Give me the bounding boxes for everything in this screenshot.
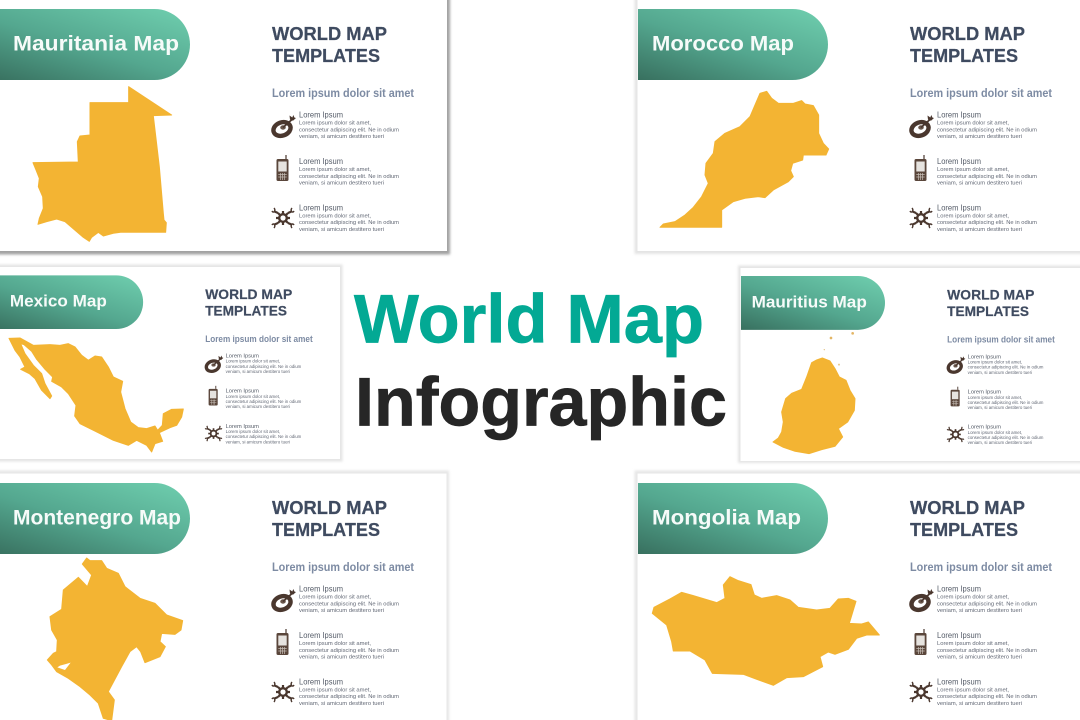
heading and text block: veniam, si amicum destitero tueri [226, 404, 290, 409]
heading and text block: consectetur adipiscing elit. Ne in odium [299, 174, 400, 180]
banner: Mauritania Map [0, 9, 190, 80]
heading and text block: consectetur adipiscing elit. Ne in odium [968, 400, 1044, 405]
heading and text block: Lorem Ipsum [968, 425, 1001, 431]
heading and text block: veniam, si amicum destitero tueri [968, 370, 1032, 375]
heading and text block: Lorem Ipsum [299, 584, 343, 594]
heading and text block: TEMPLATES [947, 303, 1029, 319]
heading and text block: Lorem Ipsum [299, 203, 343, 212]
heading and text block: veniam, si amicum destitero tueri [937, 608, 1022, 614]
heading and text block: Lorem Ipsum [968, 390, 1001, 396]
banner: Montenegro Map [0, 483, 190, 554]
heading and text block: Lorem ipsum dolor sit amet [910, 86, 1052, 100]
heading and text block: veniam, si amicum destitero tueri [299, 180, 384, 186]
banner: Mongolia Map: Mongolia Map [652, 506, 801, 530]
heading and text block: Lorem Ipsum [299, 677, 343, 686]
banner: Montenegro Map: Montenegro Map [13, 506, 181, 530]
heading and text block: consectetur adipiscing elit. Ne in odium [937, 127, 1038, 133]
map: Mongolia [652, 577, 879, 685]
banner: Mongolia Map [638, 483, 828, 554]
heading and text block: Lorem Ipsum [937, 203, 981, 212]
heading and text block: WORLD MAP [947, 287, 1034, 303]
heading and text block: veniam, si amicum destitero tueri [968, 405, 1032, 410]
banner: Mexico Map [0, 275, 143, 329]
heading and text block: veniam, si amicum destitero tueri [937, 701, 1022, 707]
heading and text block: Lorem Ipsum [226, 389, 259, 395]
heading and text block: Lorem Ipsum [937, 631, 981, 640]
heading and text block: consectetur adipiscing elit. Ne in odium [226, 434, 302, 439]
heading and text block: Lorem Ipsum [299, 157, 343, 166]
heading and text block: veniam, si amicum destitero tueri [299, 134, 384, 140]
card content: Mongolia [638, 483, 1052, 707]
heading and text block: veniam, si amicum destitero tueri [226, 369, 290, 374]
heading and text block: Lorem Ipsum [937, 157, 981, 166]
heading and text block: Lorem ipsum dolor sit amet, [937, 213, 1010, 219]
heading and text block: Lorem Ipsum [299, 631, 343, 640]
heading and text block: Lorem ipsum dolor sit amet, [299, 167, 372, 173]
panel: Morocco card [634, 0, 1080, 254]
heading and text block: consectetur adipiscing elit. Ne in odium [937, 601, 1038, 607]
heading and text block: Lorem ipsum dolor sit amet, [299, 594, 372, 600]
heading and text block: Lorem ipsum dolor sit amet, [299, 213, 372, 219]
heading and text block [271, 23, 414, 233]
heading and text block: Lorem ipsum dolor sit amet, [937, 120, 1010, 126]
banner: Mauritius Map: Mauritius Map [752, 293, 867, 311]
heading and text block: veniam, si amicum destitero tueri [937, 180, 1022, 186]
heading and text block: Lorem ipsum dolor sit amet, [937, 167, 1010, 173]
heading and text block: veniam, si amicum destitero tueri [299, 654, 384, 660]
card content: Mexico [0, 275, 313, 444]
banner: Morocco Map: Morocco Map [652, 32, 794, 56]
heading and text block: TEMPLATES [205, 302, 287, 318]
heading and text block: Lorem ipsum dolor sit amet, [299, 641, 372, 647]
heading and text block: Lorem Ipsum [968, 354, 1001, 360]
heading and text block: WORLD MAP [272, 497, 387, 518]
heading and text block: Lorem ipsum dolor sit amet, [937, 594, 1010, 600]
heading and text block: Lorem Ipsum [226, 424, 259, 430]
heading and text block: Lorem ipsum dolor sit amet [272, 86, 414, 100]
heading and text block: consectetur adipiscing elit. Ne in odium [937, 648, 1038, 654]
heading and text block: Lorem ipsum dolor sit amet [205, 334, 313, 344]
heading and text block: consectetur adipiscing elit. Ne in odium [226, 399, 302, 404]
heading and text block: TEMPLATES [272, 45, 380, 66]
heading and text block: consectetur adipiscing elit. Ne in odium [226, 364, 302, 369]
heading and text block: veniam, si amicum destitero tueri [937, 227, 1022, 233]
map: Morocco [660, 91, 829, 227]
heading and text block: consectetur adipiscing elit. Ne in odium [937, 694, 1038, 700]
banner: Mauritania Map: Mauritania Map [13, 32, 179, 56]
heading and text block: WORLD MAP [910, 23, 1025, 44]
heading and text block [205, 286, 313, 444]
card content: Mauritius [741, 276, 1055, 445]
heading and text block: Lorem ipsum dolor sit amet [910, 560, 1052, 574]
title [354, 280, 727, 440]
heading and text block: Lorem ipsum dolor sit amet, [968, 430, 1022, 435]
heading and text block: consectetur adipiscing elit. Ne in odium [937, 174, 1038, 180]
heading and text block: Lorem ipsum dolor sit amet, [937, 687, 1010, 693]
card content: Morocco [638, 9, 1052, 233]
heading and text block: consectetur adipiscing elit. Ne in odium [299, 127, 400, 133]
heading and text block: Lorem Ipsum [937, 584, 981, 594]
heading and text block: Lorem Ipsum [226, 353, 259, 359]
heading and text block: Lorem Ipsum [299, 110, 343, 120]
heading and text block [909, 497, 1052, 707]
heading and text block: veniam, si amicum destitero tueri [299, 227, 384, 233]
heading and text block: Lorem ipsum dolor sit amet, [226, 359, 280, 364]
heading and text block: Lorem ipsum dolor sit amet, [226, 429, 280, 434]
heading and text block: consectetur adipiscing elit. Ne in odium [968, 435, 1044, 440]
heading and text block: consectetur adipiscing elit. Ne in odium [299, 648, 400, 654]
panel: Mauritania card [0, 0, 450, 254]
heading and text block: Lorem ipsum dolor sit amet, [226, 394, 280, 399]
heading and text block: veniam, si amicum destitero tueri [226, 439, 290, 444]
heading and text block: Lorem ipsum dolor sit amet, [968, 395, 1022, 400]
heading and text block: veniam, si amicum destitero tueri [299, 608, 384, 614]
heading and text block: TEMPLATES [910, 45, 1018, 66]
panel: Mauritius card [738, 266, 1080, 463]
map: Mexico [9, 338, 183, 452]
heading and text block: Lorem ipsum dolor sit amet, [299, 120, 372, 126]
heading and text block: WORLD MAP [205, 286, 292, 302]
heading and text block: Lorem ipsum dolor sit amet, [299, 687, 372, 693]
heading and text block: Lorem ipsum dolor sit amet, [937, 641, 1010, 647]
banner: Morocco Map [638, 9, 828, 80]
heading and text block: consectetur adipiscing elit. Ne in odium [299, 694, 400, 700]
heading and text block: consectetur adipiscing elit. Ne in odium [937, 220, 1038, 226]
title: World Map [354, 280, 704, 358]
heading and text block [909, 23, 1052, 233]
card content: Montenegro [0, 483, 414, 707]
heading and text block: Lorem ipsum dolor sit amet [947, 335, 1055, 345]
heading and text block: consectetur adipiscing elit. Ne in odium [299, 220, 400, 226]
panel: Montenegro card [0, 470, 449, 720]
heading and text block: veniam, si amicum destitero tueri [299, 701, 384, 707]
map: Mauritius [773, 332, 855, 454]
heading and text block: TEMPLATES [272, 519, 380, 540]
heading and text block: consectetur adipiscing elit. Ne in odium [299, 601, 400, 607]
title: Infographic [355, 364, 727, 440]
heading and text block: TEMPLATES [910, 519, 1018, 540]
banner: Mauritius Map [741, 276, 885, 330]
heading and text block: veniam, si amicum destitero tueri [968, 440, 1032, 445]
heading and text block: veniam, si amicum destitero tueri [937, 654, 1022, 660]
panel: Mexico card [0, 264, 342, 462]
heading and text block [271, 497, 414, 707]
heading and text block: veniam, si amicum destitero tueri [937, 134, 1022, 140]
heading and text block [947, 287, 1055, 445]
panel: Mongolia card [634, 470, 1080, 720]
heading and text block: Lorem ipsum dolor sit amet, [968, 360, 1022, 365]
heading and text block: Lorem Ipsum [937, 677, 981, 686]
heading and text block: consectetur adipiscing elit. Ne in odium [968, 365, 1044, 370]
map: Mauritania [33, 87, 172, 241]
map: Montenegro [47, 558, 183, 720]
heading and text block: Lorem Ipsum [937, 110, 981, 120]
heading and text block: WORLD MAP [272, 23, 387, 44]
heading and text block: WORLD MAP [910, 497, 1025, 518]
banner: Mexico Map: Mexico Map [10, 293, 107, 311]
heading and text block: Lorem ipsum dolor sit amet [272, 560, 414, 574]
